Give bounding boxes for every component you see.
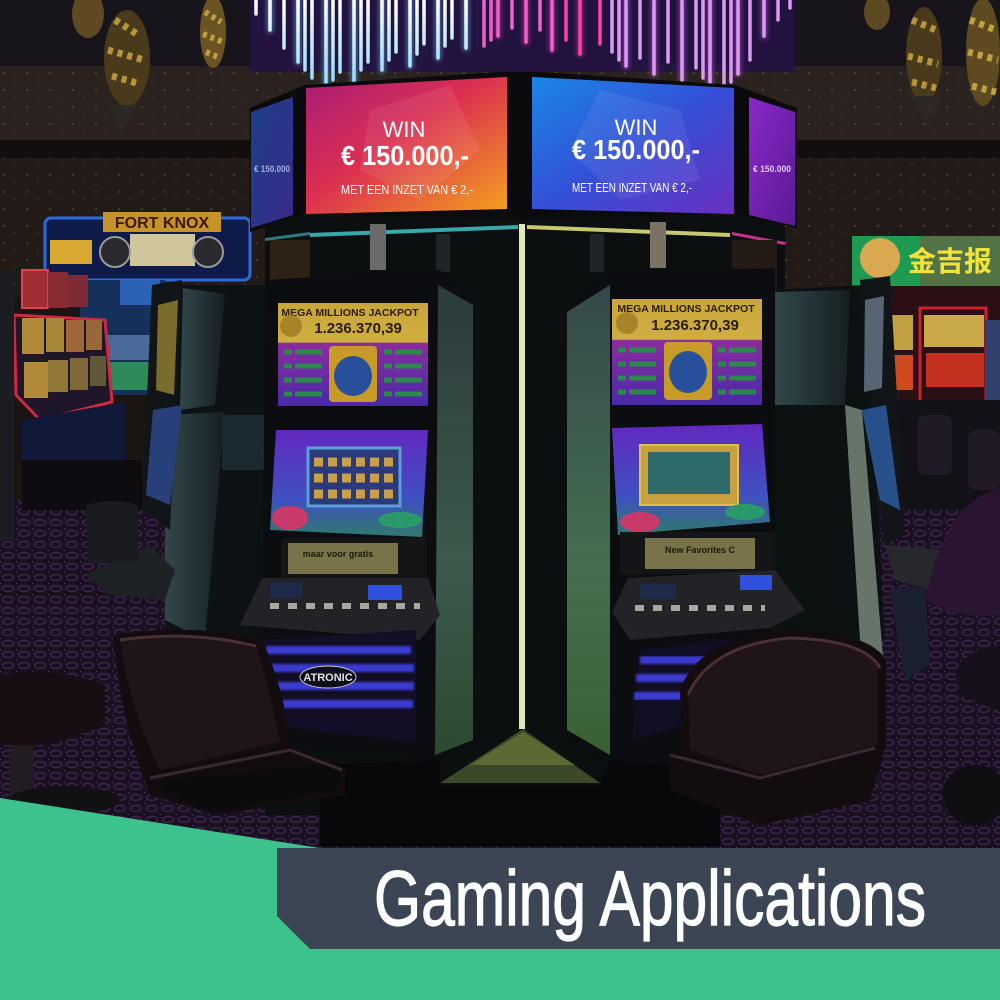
foreground stool left xyxy=(113,630,345,815)
sign: far right panel xyxy=(749,97,795,226)
sign: right WIN panel xyxy=(532,77,734,214)
lower panel with logo xyxy=(632,635,770,740)
lower panel with logo xyxy=(258,630,416,742)
bill and ticket panel xyxy=(282,538,427,578)
background slot machines: Fort Knox bank xyxy=(0,212,250,540)
hanging gold ornaments xyxy=(72,0,1000,132)
sign: left WIN panel xyxy=(306,77,507,214)
sign: right WIN panel: WIN xyxy=(615,115,657,140)
jackpot top screen: MEGA MILLIONS JACKPOT xyxy=(281,307,419,319)
bill and ticket panel xyxy=(620,532,775,574)
sign: right WIN panel: € 150.000,- xyxy=(572,134,700,165)
machine top lights xyxy=(370,224,386,270)
button deck xyxy=(240,578,440,640)
background slot machines: Fort Knox bank: FORT KNOX xyxy=(115,215,209,232)
jackpot top screen xyxy=(612,299,762,405)
jackpot top screen: 1.236.370,39 xyxy=(314,320,402,337)
central column xyxy=(265,215,785,815)
carpet floor xyxy=(0,500,1000,850)
sign: left WIN panel: MET EEN INZET VAN € 2,- xyxy=(341,182,473,197)
sign: left WIN panel: € 150.000,- xyxy=(341,140,469,171)
title banner xyxy=(277,848,1000,949)
sign: far right panel: € 150.000 xyxy=(753,164,791,174)
game screen xyxy=(270,430,428,537)
jackpot top screen xyxy=(278,303,428,406)
game screen xyxy=(612,424,770,535)
main slot machine left xyxy=(240,270,475,760)
button deck xyxy=(612,570,805,640)
main slot machine left: maar voor gratis xyxy=(303,549,373,559)
side machine right xyxy=(772,276,960,680)
jackpot top screen: 1.236.370,39 xyxy=(651,317,739,334)
green corner panel xyxy=(0,798,1000,1000)
sign: right WIN panel: MET EEN INZET VAN € 2,- xyxy=(572,180,692,195)
sign: far left panel xyxy=(251,97,293,228)
sign crown frame xyxy=(250,72,797,232)
sign: far left panel: € 150.000 xyxy=(254,164,290,174)
lower panel with logo: ATRO xyxy=(699,669,730,681)
LED light strands chandelier xyxy=(250,0,795,90)
main slot machine right xyxy=(567,268,805,765)
side machine left xyxy=(85,280,270,650)
background slot machines: right bank xyxy=(852,236,1000,510)
foreground stool right xyxy=(670,630,886,825)
lower panel with logo: ATRONIC xyxy=(303,672,353,684)
base plinth xyxy=(320,760,720,846)
background slot machines: right bank: 金吉报 xyxy=(908,246,992,277)
main slot machine right: New Favorites C xyxy=(665,545,736,555)
foreground stools at edges xyxy=(0,488,1000,825)
jackpot top screen: MEGA MILLIONS JACKPOT xyxy=(617,303,755,315)
sign: left WIN panel: WIN xyxy=(383,117,425,142)
